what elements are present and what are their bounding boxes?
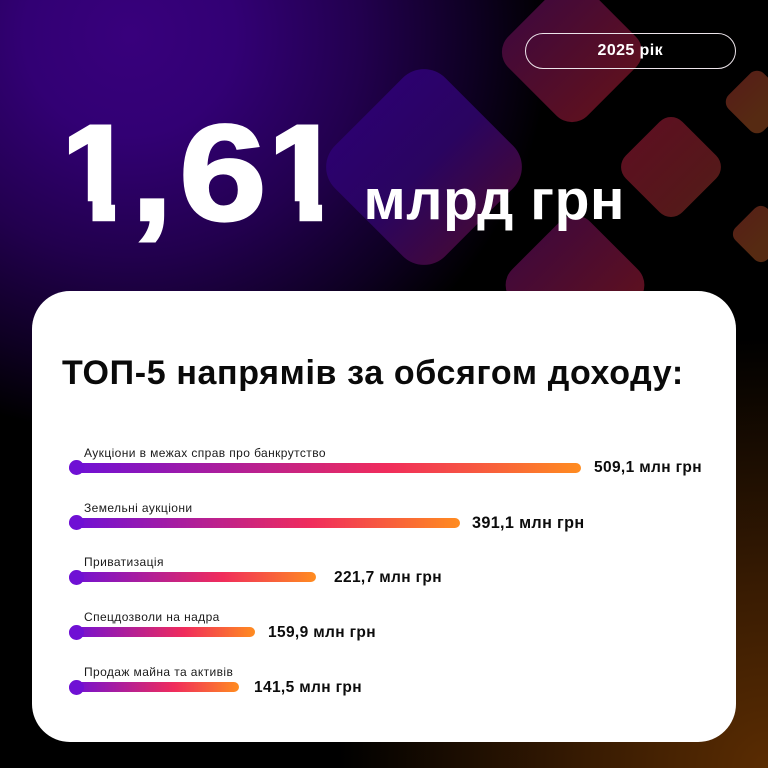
row: property sale [69,665,362,696]
row: privatization: 221,7 млн грн [334,569,442,586]
heading: ТОП-5 напрямів за обсягом доходу: [62,354,684,392]
row: bankruptcy auctions: 509,1 млн грн [594,458,702,476]
big number: 1 [54,97,138,250]
row: subsoil permits [69,610,376,641]
decorative diamonds [326,0,768,291]
row: property sale: Продаж майна та активів [84,665,233,679]
row: property sale: 141,5 млн грн [254,679,362,696]
row: subsoil permits: 159,9 млн грн [268,624,376,641]
row: subsoil permits: Спецдозволи на надра [84,610,220,624]
row: land auctions [69,500,584,532]
row: privatization: Приватизація [84,555,164,569]
row: land auctions: Земельні аукціони [84,500,192,514]
row: land auctions: 391,1 млн грн [472,514,584,532]
big number [68,97,322,250]
row: privatization [69,555,442,586]
unit: млрд грн [364,168,625,232]
panel: top 5 [32,291,736,742]
year pill [525,33,736,68]
row: bankruptcy auctions [69,446,702,476]
big number: 1 [261,97,345,250]
big number: , [131,97,173,250]
year pill: 2025 рік [598,42,663,59]
big number: 6 [179,97,267,250]
row: bankruptcy auctions: Аукціони в межах справ про банкрутство [84,446,326,460]
